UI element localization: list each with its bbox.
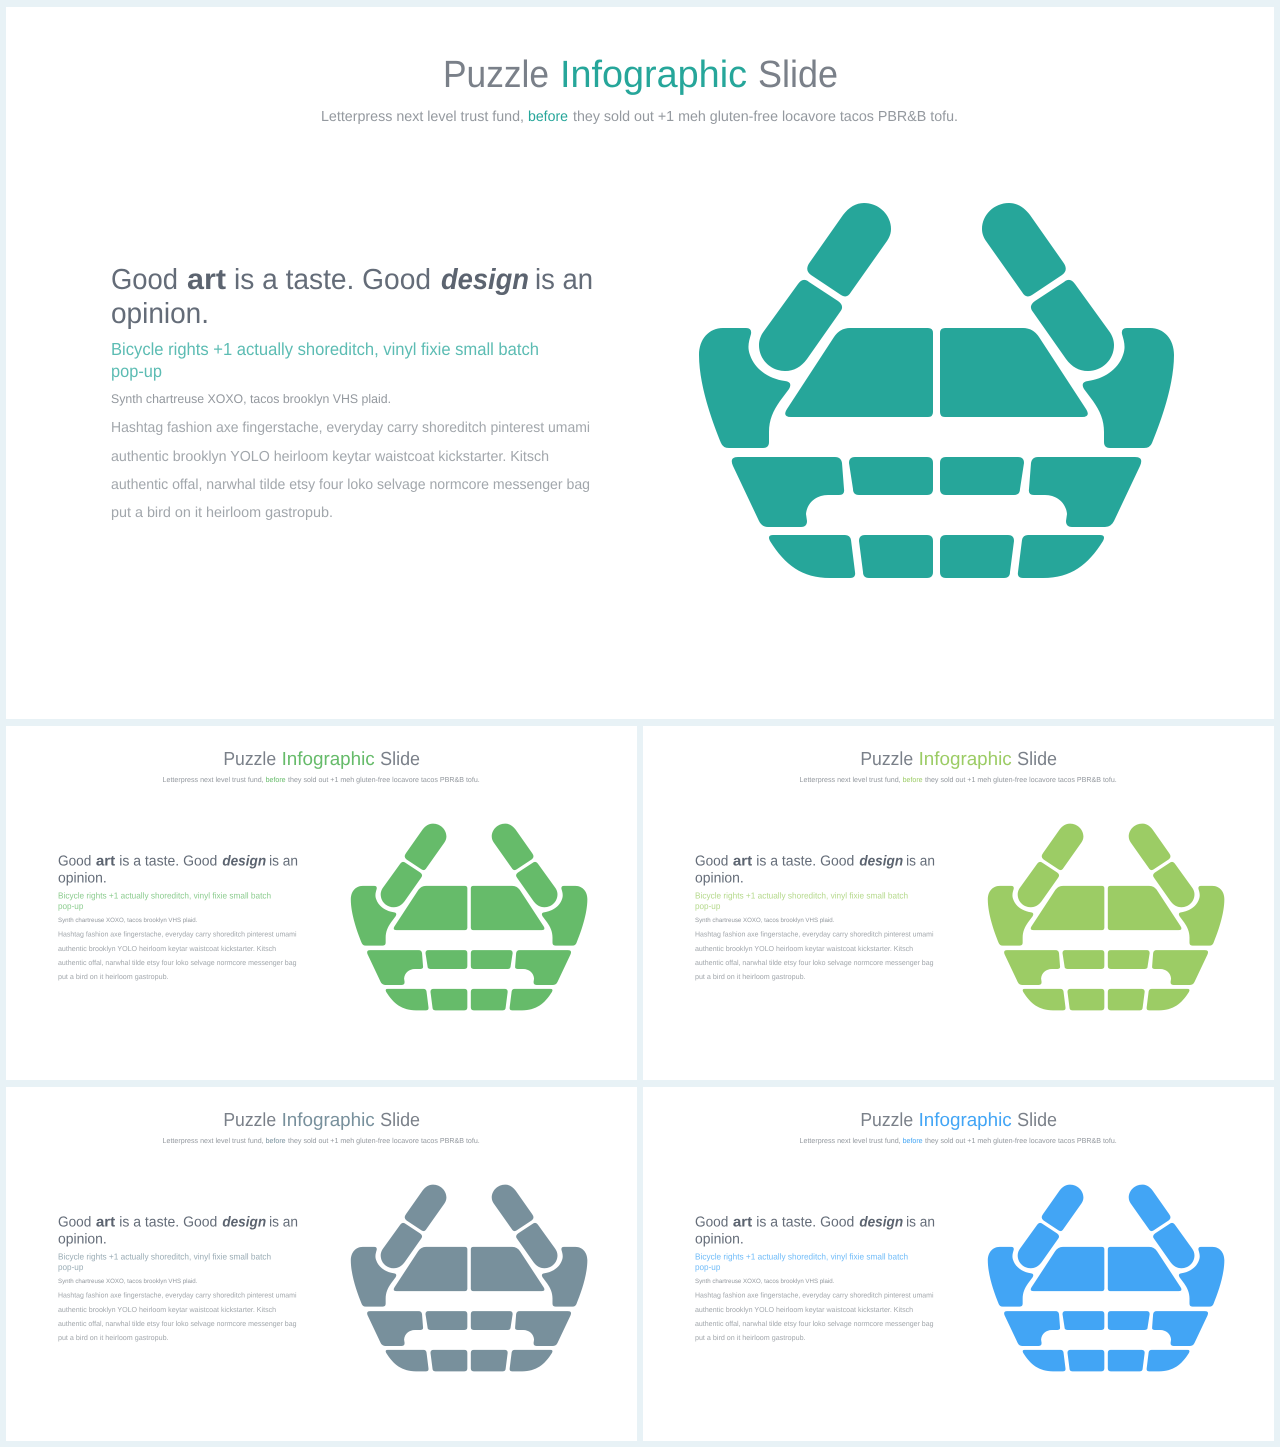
subtitle: Letterpress next level trust fund, xyxy=(163,776,264,784)
heading xyxy=(695,853,935,886)
body text: Hashtag fashion axe fingerstache, everyday carry shoreditch pinterest umami xyxy=(695,1292,934,1300)
blue subheading: Bicycle rights +1 actually shoreditch, vinyl fixie small batch xyxy=(695,1251,908,1261)
heading: design xyxy=(222,853,266,869)
subtitle: they sold out +1 meh gluten-free locavore tacos PBR&B tofu. xyxy=(288,1137,480,1145)
body text: authentic brooklyn YOLO heirloom keytar waistcoat kickstarter. Kitsch xyxy=(695,945,913,953)
heading: art xyxy=(187,264,226,296)
title: Puzzle xyxy=(860,748,913,769)
title xyxy=(443,54,838,96)
title: Slide xyxy=(1017,1109,1057,1130)
heading: is an xyxy=(269,853,298,869)
body text: put a bird on it heirloom gastropub. xyxy=(58,973,169,981)
body text: authentic offal, narwhal tilde etsy four loko selvage normcore messenger bag xyxy=(58,1320,297,1328)
body text: Synth chartreuse XOXO, tacos brooklyn VHS plaid. xyxy=(111,392,391,406)
subtitle: they sold out +1 meh gluten-free locavore tacos PBR&B tofu. xyxy=(925,776,1117,784)
body text: authentic brooklyn YOLO heirloom keytar waistcoat kickstarter. Kitsch xyxy=(111,449,549,465)
heading: is a taste. Good xyxy=(756,853,854,869)
heading: is an xyxy=(269,1214,298,1230)
heading: design xyxy=(222,1214,266,1230)
body text: authentic brooklyn YOLO heirloom keytar waistcoat kickstarter. Kitsch xyxy=(58,945,276,953)
heading: is a taste. Good xyxy=(119,1214,217,1230)
subtitle: they sold out +1 meh gluten-free locavore tacos PBR&B tofu. xyxy=(925,1137,1117,1145)
heading: is a taste. Good xyxy=(119,853,217,869)
heading: art xyxy=(733,1214,752,1230)
heading: is an xyxy=(906,1214,935,1230)
light green subheading: Bicycle rights +1 actually shoreditch, vinyl fixie small batch xyxy=(695,890,908,900)
panel: slate slide xyxy=(6,1087,637,1441)
heading: is a taste. Good xyxy=(234,264,431,296)
green subheading: Bicycle rights +1 actually shoreditch, vinyl fixie small batch xyxy=(58,890,271,900)
subtitle: before xyxy=(528,109,568,125)
heading: opinion. xyxy=(695,870,744,886)
body text: Synth chartreuse XOXO, tacos brooklyn VHS plaid. xyxy=(695,1278,834,1285)
light green subheading: pop-up xyxy=(695,901,720,911)
title xyxy=(223,1109,420,1130)
title: Slide xyxy=(380,748,420,769)
green subheading: pop-up xyxy=(58,901,83,911)
heading: design xyxy=(441,264,529,296)
body text xyxy=(58,917,297,981)
body text: put a bird on it heirloom gastropub. xyxy=(695,973,806,981)
body text: Synth chartreuse XOXO, tacos brooklyn VHS plaid. xyxy=(58,1278,197,1285)
panel: light green slide xyxy=(643,726,1274,1080)
title: Puzzle xyxy=(223,1109,276,1130)
title: Infographic xyxy=(282,748,375,769)
blue subheading: pop-up xyxy=(695,1262,720,1272)
heading: Good xyxy=(58,1214,91,1230)
title: Infographic xyxy=(560,54,747,96)
heading: opinion. xyxy=(58,1231,107,1247)
subtitle: before xyxy=(266,1137,286,1145)
title: Puzzle xyxy=(860,1109,913,1130)
body text: put a bird on it heirloom gastropub. xyxy=(695,1334,806,1342)
subtitle xyxy=(321,109,958,125)
subtitle: Letterpress next level trust fund, xyxy=(321,109,524,125)
subtitle: Letterpress next level trust fund, xyxy=(800,1137,901,1145)
slate subheading: pop-up xyxy=(58,1262,83,1272)
title xyxy=(860,1109,1057,1130)
blue subheading xyxy=(695,1251,908,1272)
title: Slide xyxy=(758,54,838,96)
slate subheading xyxy=(58,1251,271,1272)
title xyxy=(860,748,1057,769)
subtitle xyxy=(163,776,480,784)
body text: authentic offal, narwhal tilde etsy four loko selvage normcore messenger bag xyxy=(58,959,297,967)
panel: blue slide xyxy=(643,1087,1274,1441)
title xyxy=(223,748,420,769)
icon: slate puzzle basket xyxy=(351,1185,587,1371)
icon: green puzzle basket xyxy=(351,824,587,1010)
body text: Hashtag fashion axe fingerstache, everyday carry shoreditch pinterest umami xyxy=(58,931,297,939)
teal subheading: Bicycle rights +1 actually shoreditch, vinyl fixie small batch xyxy=(111,339,539,359)
subtitle xyxy=(163,1137,480,1145)
panel: main teal slide xyxy=(6,7,1274,719)
body text: authentic brooklyn YOLO heirloom keytar waistcoat kickstarter. Kitsch xyxy=(695,1306,913,1314)
heading: is a taste. Good xyxy=(756,1214,854,1230)
body text xyxy=(58,1278,297,1342)
heading: art xyxy=(96,853,115,869)
subtitle xyxy=(800,1137,1117,1145)
heading: is an xyxy=(906,853,935,869)
slate subheading: Bicycle rights +1 actually shoreditch, vinyl fixie small batch xyxy=(58,1251,271,1261)
body text: Synth chartreuse XOXO, tacos brooklyn VHS plaid. xyxy=(58,917,197,924)
green subheading xyxy=(58,890,271,911)
subtitle: before xyxy=(903,776,923,784)
panel: green slide xyxy=(6,726,637,1080)
heading: Good xyxy=(695,1214,728,1230)
heading xyxy=(695,1214,935,1247)
heading xyxy=(111,264,593,330)
subtitle: Letterpress next level trust fund, xyxy=(800,776,901,784)
heading: opinion. xyxy=(695,1231,744,1247)
heading xyxy=(58,853,298,886)
body text: authentic offal, narwhal tilde etsy four loko selvage normcore messenger bag xyxy=(111,477,590,493)
heading: design xyxy=(859,1214,903,1230)
body text: Hashtag fashion axe fingerstache, everyday carry shoreditch pinterest umami xyxy=(111,420,590,436)
heading: Good xyxy=(111,264,178,296)
subtitle: before xyxy=(266,776,286,784)
body text: put a bird on it heirloom gastropub. xyxy=(111,505,333,521)
body text: put a bird on it heirloom gastropub. xyxy=(58,1334,169,1342)
body text xyxy=(111,392,590,521)
subtitle xyxy=(800,776,1117,784)
title: Puzzle xyxy=(443,54,549,96)
teal subheading xyxy=(111,339,539,381)
heading: opinion. xyxy=(58,870,107,886)
heading xyxy=(58,1214,298,1247)
body text: authentic offal, narwhal tilde etsy four loko selvage normcore messenger bag xyxy=(695,959,934,967)
icon: teal puzzle basket xyxy=(699,203,1174,578)
heading: design xyxy=(859,853,903,869)
heading: Good xyxy=(58,853,91,869)
title: Infographic xyxy=(919,748,1012,769)
subtitle: before xyxy=(903,1137,923,1145)
body text: Synth chartreuse XOXO, tacos brooklyn VHS plaid. xyxy=(695,917,834,924)
body text: authentic offal, narwhal tilde etsy four loko selvage normcore messenger bag xyxy=(695,1320,934,1328)
heading: Good xyxy=(695,853,728,869)
icon: light green puzzle basket xyxy=(988,824,1224,1010)
title: Slide xyxy=(1017,748,1057,769)
title: Infographic xyxy=(282,1109,375,1130)
subtitle: they sold out +1 meh gluten-free locavore tacos PBR&B tofu. xyxy=(573,109,958,125)
heading: art xyxy=(96,1214,115,1230)
body text: Hashtag fashion axe fingerstache, everyday carry shoreditch pinterest umami xyxy=(695,931,934,939)
light green subheading xyxy=(695,890,908,911)
heading: opinion. xyxy=(111,298,209,330)
body text xyxy=(695,917,934,981)
subtitle: Letterpress next level trust fund, xyxy=(163,1137,264,1145)
heading: art xyxy=(733,853,752,869)
body text: Hashtag fashion axe fingerstache, everyday carry shoreditch pinterest umami xyxy=(58,1292,297,1300)
body text xyxy=(695,1278,934,1342)
teal subheading: pop-up xyxy=(111,361,162,381)
title: Puzzle xyxy=(223,748,276,769)
body text: authentic brooklyn YOLO heirloom keytar waistcoat kickstarter. Kitsch xyxy=(58,1306,276,1314)
heading: is an xyxy=(535,264,593,296)
title: Slide xyxy=(380,1109,420,1130)
title: Infographic xyxy=(919,1109,1012,1130)
icon: blue puzzle basket xyxy=(988,1185,1224,1371)
subtitle: they sold out +1 meh gluten-free locavore tacos PBR&B tofu. xyxy=(288,776,480,784)
